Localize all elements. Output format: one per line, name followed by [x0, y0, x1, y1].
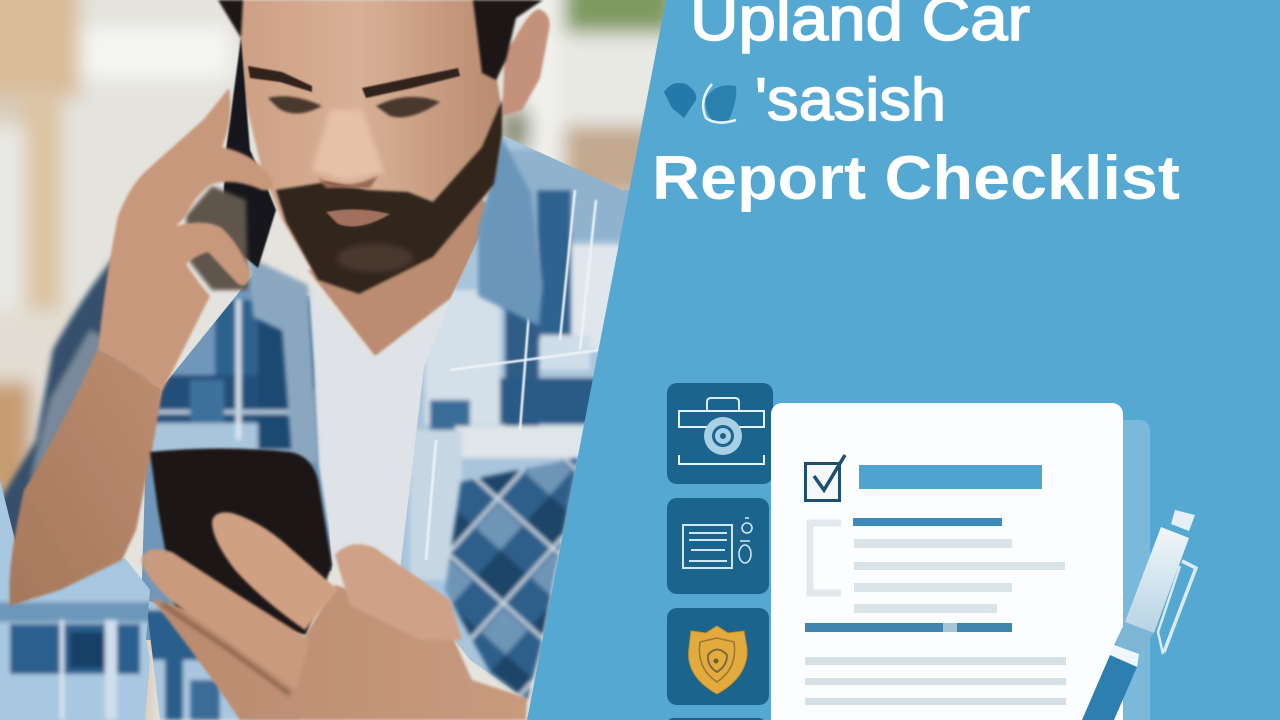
heading bar — [859, 465, 1042, 489]
right eye — [376, 97, 440, 117]
sub heading bar — [853, 518, 1002, 526]
lips — [326, 209, 390, 226]
pocket lower plaid — [445, 458, 578, 700]
hair left — [218, 0, 243, 38]
grey text lines — [854, 539, 1065, 613]
nose — [312, 110, 384, 180]
index finger — [212, 512, 338, 630]
beard — [276, 100, 502, 294]
ear — [502, 9, 550, 116]
icon: butterfly glyph left — [664, 83, 696, 118]
left brow — [248, 66, 312, 92]
phone back behind fingers — [186, 186, 248, 290]
finger shadow — [162, 604, 290, 694]
sleeve — [0, 470, 155, 720]
back document sheet — [1100, 420, 1150, 720]
icon: butterfly glyph right — [703, 84, 736, 123]
forearm — [9, 349, 163, 606]
middle finger — [141, 549, 310, 690]
shirt left torso — [142, 276, 332, 640]
face — [240, 0, 502, 292]
left eye — [268, 96, 322, 114]
title — [652, 0, 1180, 213]
neck — [308, 190, 495, 356]
held phone — [150, 448, 332, 635]
title line: garbled crash word: 'sasish — [755, 66, 946, 133]
faint bracket — [810, 523, 841, 593]
icon tile: fourth partly cropped — [667, 718, 765, 720]
dark divider bar — [805, 623, 1012, 632]
tee shirt — [308, 285, 451, 580]
bottom hand — [151, 585, 527, 720]
nostril shade — [318, 176, 378, 188]
icon tile: police badge — [667, 608, 769, 705]
lower text lines — [805, 657, 1066, 705]
left collar and placket — [249, 257, 318, 462]
icon tile: report form — [667, 498, 769, 594]
right collar — [478, 138, 543, 326]
ear phone — [222, 38, 276, 268]
photo: man on phone — [0, 0, 645, 720]
lower left shirt — [148, 601, 300, 720]
blue panel — [527, 0, 1280, 720]
beard chin highlight — [337, 244, 413, 272]
thin plaid lines — [426, 190, 600, 560]
right brow — [362, 68, 460, 98]
blurred room background — [0, 0, 680, 720]
raised hand — [98, 88, 273, 390]
checkbox with tick — [806, 455, 845, 500]
hair right — [473, 0, 543, 80]
checklist document — [771, 403, 1123, 720]
title line: Report Checklist: Report Checklist — [652, 144, 1180, 213]
thumb — [335, 544, 462, 640]
icon tile: camera — [667, 383, 773, 484]
upper arm sleeve behind — [0, 257, 170, 560]
right shirt body — [400, 135, 630, 700]
icon: pen — [1082, 510, 1196, 720]
